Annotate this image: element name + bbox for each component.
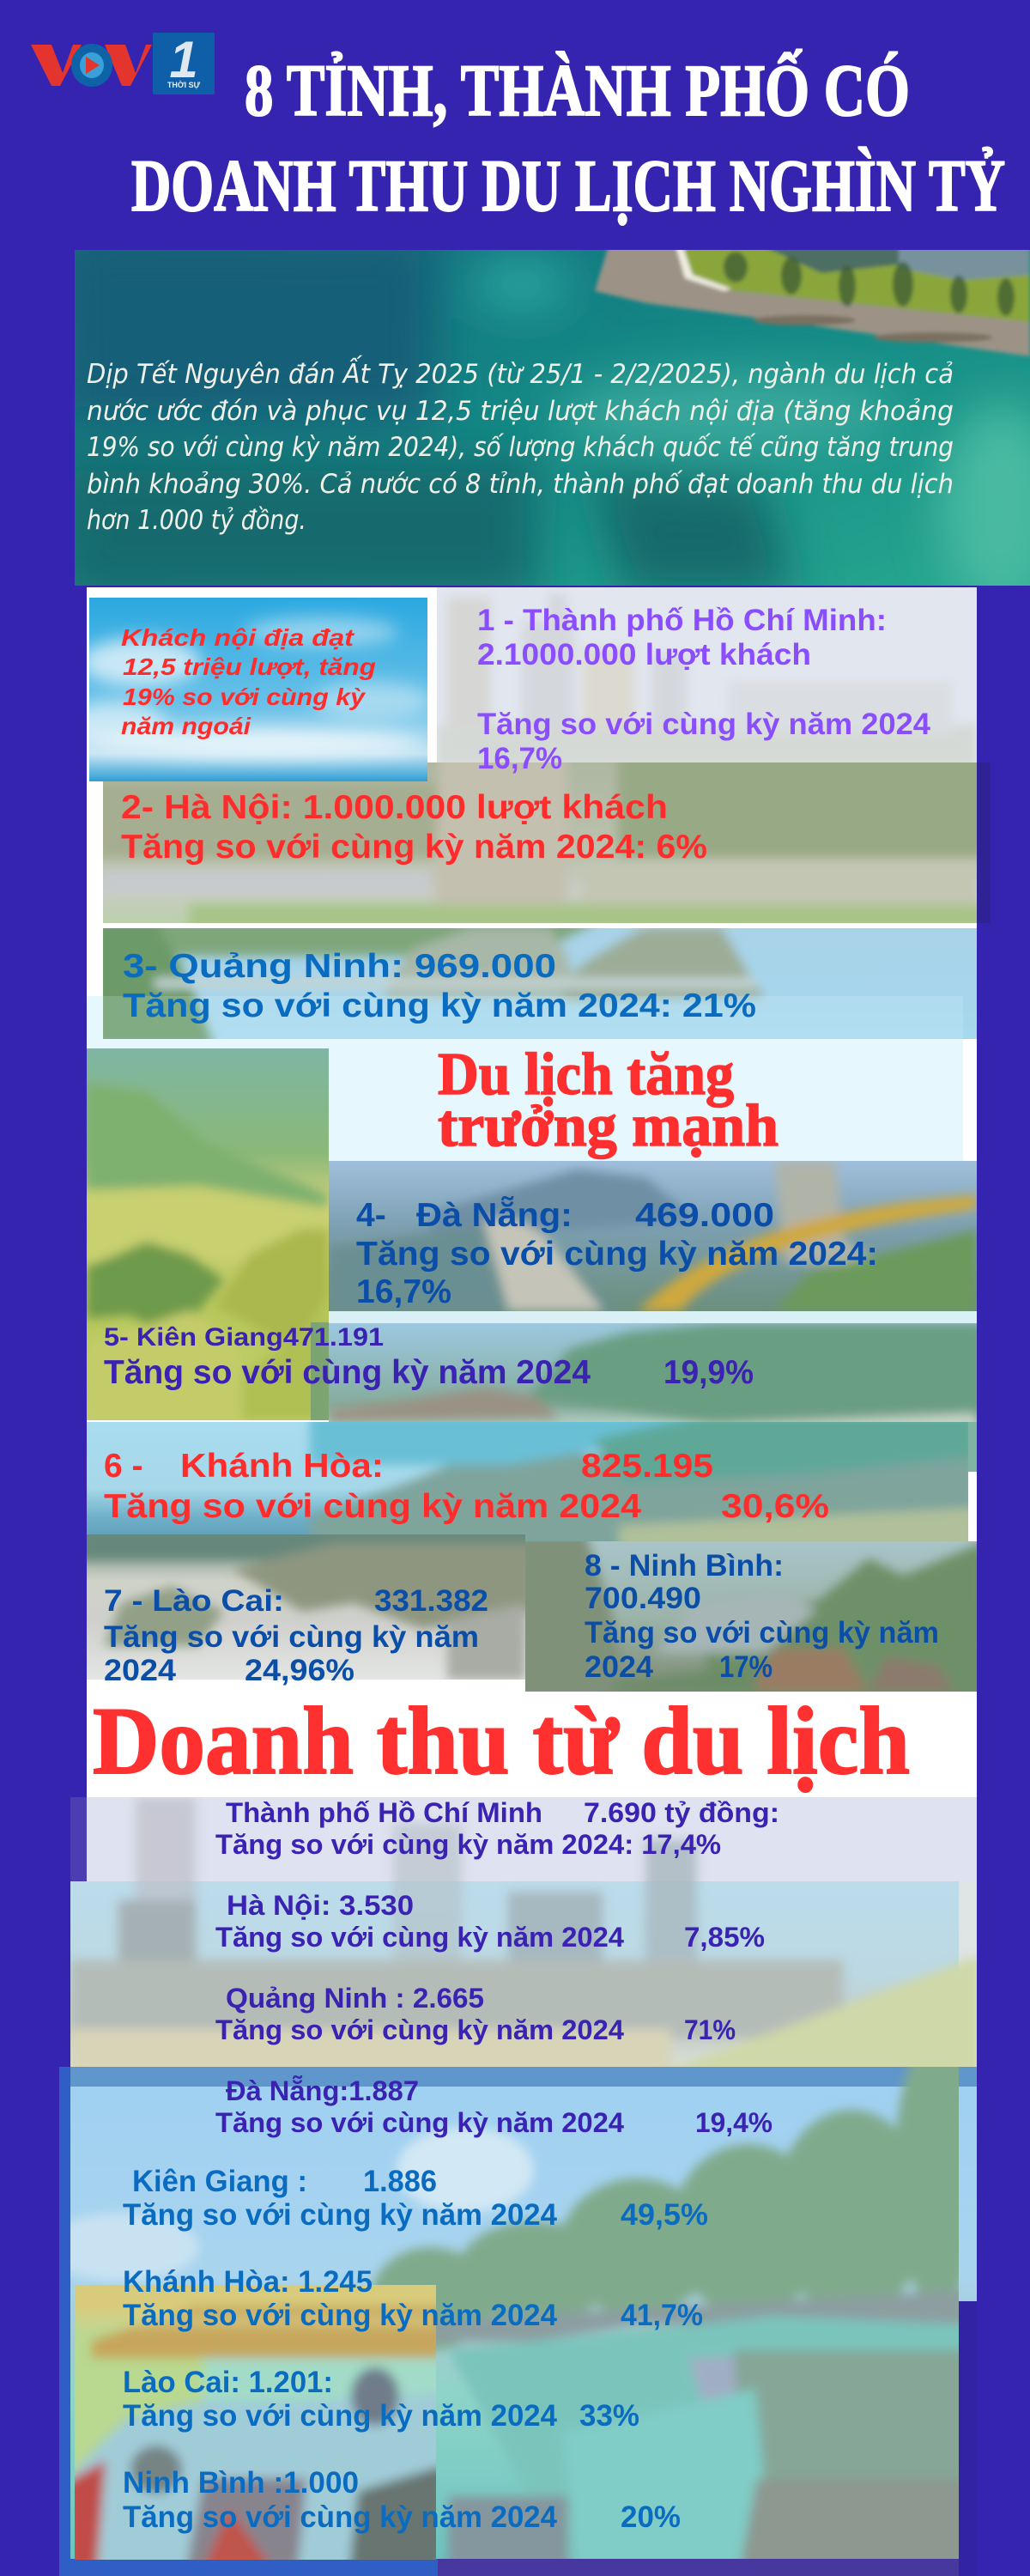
- text block: revenue list: Quảng Ninh : 2.665: [226, 1983, 484, 2014]
- panel: Quảng Ninh visitors: 3- Quảng Ninh: 969.000: [123, 948, 556, 985]
- text block: revenue list: Tăng so với cùng kỳ năm 2024: [123, 2198, 558, 2232]
- panel: Lào Cai visitors: 24,96%: [245, 1654, 354, 1687]
- panel: Ninh Bình visitors: Tăng so với cùng kỳ năm: [585, 1616, 939, 1649]
- panel: Đà Nẵng visitors: 469.000: [635, 1197, 774, 1234]
- text block: revenue list: 49,5%: [621, 2198, 708, 2232]
- panel: domestic visitors callout: Khách nội địa đạt: [121, 624, 355, 651]
- text block: revenue list: Tăng so với cùng kỳ năm 2024: [215, 1922, 624, 1953]
- heading: Doanh thu từ du lịch: Doanh thu từ du lịch: [93, 1688, 910, 1795]
- band: pale strip: [329, 1311, 977, 1323]
- text block: revenue list: 7.690 tỷ đồng:: [584, 1797, 779, 1828]
- panel: domestic visitors callout: [64, 598, 433, 781]
- text block: intro paragraph: [87, 356, 954, 536]
- panel: Lào Cai visitors: [78, 1526, 563, 1687]
- text block: revenue list: Đà Nẵng:1.887: [226, 2075, 419, 2106]
- text block: revenue list: 33%: [579, 2399, 639, 2433]
- panel: Ninh Bình visitors: 2024: [585, 1650, 654, 1684]
- panel: Hồ Chí Minh visitors: Tăng so với cùng kỳ năm 2024: [477, 708, 931, 741]
- panel: intro sea photo: [58, 233, 1030, 611]
- panel: Hồ Chí Minh visitors: [437, 587, 977, 775]
- text block: revenue list: Lào Cai: 1.201:: [123, 2366, 333, 2399]
- logo: VOV1: [31, 31, 215, 94]
- band: pale strip under Quảng Ninh: [87, 996, 963, 1048]
- panel: Đà Nẵng visitors: [329, 1161, 977, 1311]
- panel: domestic visitors callout: 12,5 triệu lượt, tăng: [123, 653, 376, 680]
- panel: domestic visitors callout: 19% so với cùng kỳ: [123, 683, 367, 710]
- text block: Hà Nội figures: Tăng so với cùng kỳ năm 2024: 6%: [121, 829, 707, 866]
- panel: Hà Nội visitors: [94, 754, 991, 930]
- panel: Ninh Bình visitors: 17%: [719, 1650, 772, 1684]
- text block: revenue list: Thành phố Hồ Chí Minh: [226, 1797, 542, 1828]
- panel: Kiên Giang visitors: Tăng so với cùng kỳ năm 2024: [104, 1354, 591, 1391]
- panel: Đà Nẵng visitors: Tăng so với cùng kỳ năm 2024:: [356, 1236, 878, 1273]
- text block: revenue list: Tăng so với cùng kỳ năm 2024: [215, 2107, 624, 2138]
- panel: Quảng Ninh visitors: [94, 920, 977, 1048]
- text block: intro paragraph: bình khoảng 30%. Cả nước có 8 tỉnh, thành phố đạt doanh thu du lịch: [87, 469, 954, 500]
- text block: revenue list: 71%: [684, 2014, 736, 2045]
- title: [131, 48, 1005, 227]
- panel: Đà Nẵng visitors: 4-: [356, 1197, 386, 1234]
- text block: intro paragraph: 19% so với cùng kỳ năm 2024), số lượng khách quốc tế cũng tăng trung: [87, 432, 954, 463]
- heading: Du lịch tăng trưởng mạnh: [438, 1042, 779, 1159]
- text block: revenue list: Hà Nội: 3.530: [227, 1890, 414, 1921]
- text block: Hà Nội figures: 2- Hà Nội: 1.000.000 lượt khách: [121, 789, 668, 826]
- text block: revenue list: 1.886: [363, 2165, 437, 2198]
- photo: Hồ Chí Minh city skyline: [70, 1797, 980, 2075]
- text block: revenue list: Tăng so với cùng kỳ năm 2024: [215, 2014, 624, 2045]
- panel: Ninh Bình visitors: [517, 1533, 985, 1700]
- panel: Hồ Chí Minh visitors: 2.1000.000 lượt khách: [477, 638, 811, 671]
- text block: revenue list: 19,4%: [695, 2107, 772, 2138]
- panel: Lào Cai visitors: 331.382: [374, 1584, 488, 1618]
- panel: Đà Nẵng visitors: 16,7%: [356, 1273, 451, 1310]
- text block: intro paragraph: nước ước đón và phục vụ 12,5 triệu lượt khách nội địa (tăng khoảng: [87, 396, 954, 427]
- panel: Kiên Giang visitors: [104, 1322, 985, 1480]
- panel: Quảng Ninh visitors: Tăng so với cùng kỳ năm 2024: 21%: [123, 987, 756, 1024]
- panel: Kiên Giang visitors: 5- Kiên Giang471.191: [104, 1323, 384, 1352]
- panel: domestic visitors callout: năm ngoái: [121, 713, 251, 739]
- text block: revenue list: Ninh Bình :1.000: [123, 2466, 359, 2500]
- photo: tropical beach collage: [45, 2032, 980, 2576]
- panel: Lào Cai visitors: 7 - Lào Cai:: [104, 1584, 284, 1618]
- panel: Lào Cai visitors: Tăng so với cùng kỳ năm: [104, 1620, 479, 1654]
- text block: revenue list: Tăng so với cùng kỳ năm 2024: [123, 2399, 558, 2433]
- heading: Du lịch tăng trưởng mạnh: Du lịch tăng: [438, 1042, 734, 1108]
- panel: Ninh Bình visitors: 8 - Ninh Bình:: [585, 1549, 784, 1583]
- panel: Khánh Hòa visitors: [87, 1413, 977, 1550]
- text block: revenue list: Tăng so với cùng kỳ năm 2024: 17,4%: [215, 1829, 721, 1860]
- panel: Khánh Hòa visitors: Khánh Hòa:: [180, 1448, 384, 1485]
- panel: Hồ Chí Minh visitors: 16,7%: [477, 742, 562, 775]
- panel: Đà Nẵng visitors: Đà Nẵng:: [416, 1196, 573, 1234]
- text block: revenue list: Khánh Hòa: 1.245: [123, 2265, 373, 2299]
- photo: rice terraces: [87, 1048, 329, 1420]
- logo: VOV1: THỜI SỰ: [167, 80, 201, 89]
- text block: revenue list: 7,85%: [684, 1922, 765, 1953]
- panel: growth heading band: [329, 1039, 963, 1161]
- text block: revenue list: [123, 1797, 779, 2534]
- text block: revenue list: Kiên Giang :: [132, 2165, 307, 2198]
- text block: revenue list: 41,7%: [621, 2299, 703, 2332]
- panel: Lào Cai visitors: 2024: [104, 1654, 177, 1687]
- heading: Du lịch tăng trưởng mạnh: trưởng mạnh: [438, 1093, 779, 1159]
- text block: Hà Nội figures: [121, 789, 707, 866]
- text block: revenue list: 20%: [621, 2500, 681, 2534]
- text block: revenue list: Tăng so với cùng kỳ năm 2024: [123, 2299, 558, 2332]
- panel: revenue Hồ Chí Minh band: [70, 1797, 977, 1881]
- logo: VOV1: 1: [169, 31, 198, 88]
- panel: Khánh Hòa visitors: Tăng so với cùng kỳ năm 2024: [104, 1488, 641, 1525]
- panel: Khánh Hòa visitors: 825.195: [581, 1448, 713, 1485]
- panel: Kiên Giang visitors: 19,9%: [663, 1354, 754, 1391]
- panel: Ninh Bình visitors: 700.490: [585, 1582, 701, 1615]
- text block: revenue list: Tăng so với cùng kỳ năm 2024: [123, 2500, 558, 2534]
- text block: intro paragraph: hơn 1.000 tỷ đồng.: [87, 505, 306, 536]
- panel: Khánh Hòa visitors: 6 -: [104, 1448, 143, 1485]
- panel: Khánh Hòa visitors: 30,6%: [721, 1488, 829, 1525]
- panel: Hồ Chí Minh visitors: 1 - Thành phố Hồ Chí Minh:: [477, 604, 887, 637]
- text block: intro paragraph: Dịp Tết Nguyên đán Ất Tỵ 2025 (từ 25/1 - 2/2/2025), ngành du lịch cả: [87, 356, 954, 390]
- panel: white content sheet: [87, 587, 977, 1797]
